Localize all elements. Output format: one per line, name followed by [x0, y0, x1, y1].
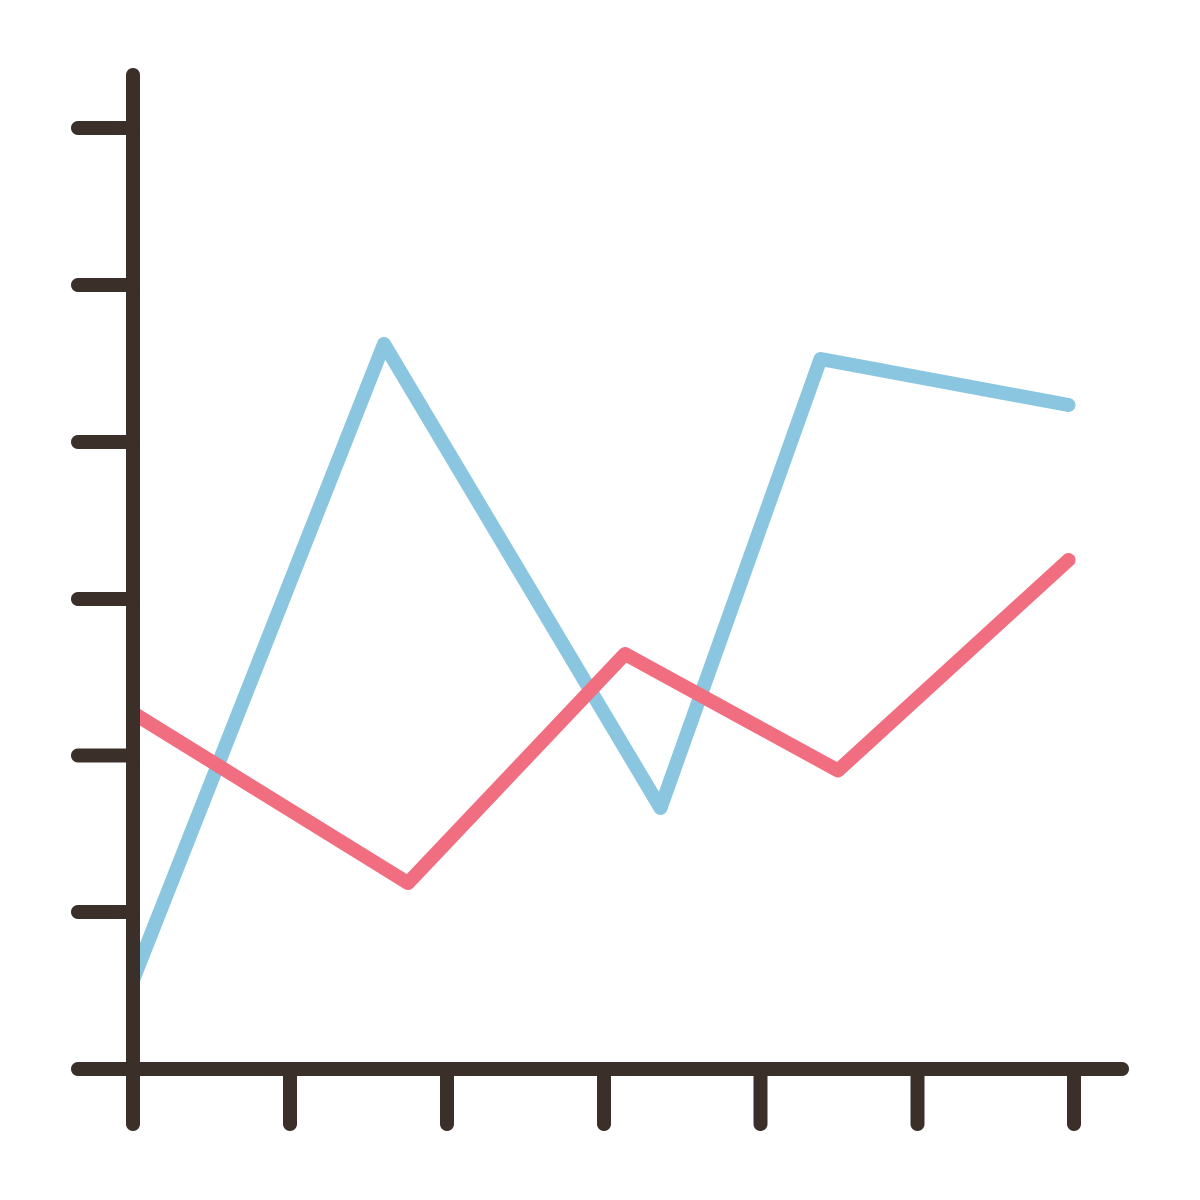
blue data line	[133, 344, 1068, 980]
x axis	[78, 1062, 1122, 1076]
chart axes	[78, 75, 1122, 1124]
y axis ticks	[78, 128, 133, 912]
red data line	[133, 560, 1068, 883]
y axis	[126, 75, 140, 1124]
x axis ticks	[290, 1069, 1074, 1124]
